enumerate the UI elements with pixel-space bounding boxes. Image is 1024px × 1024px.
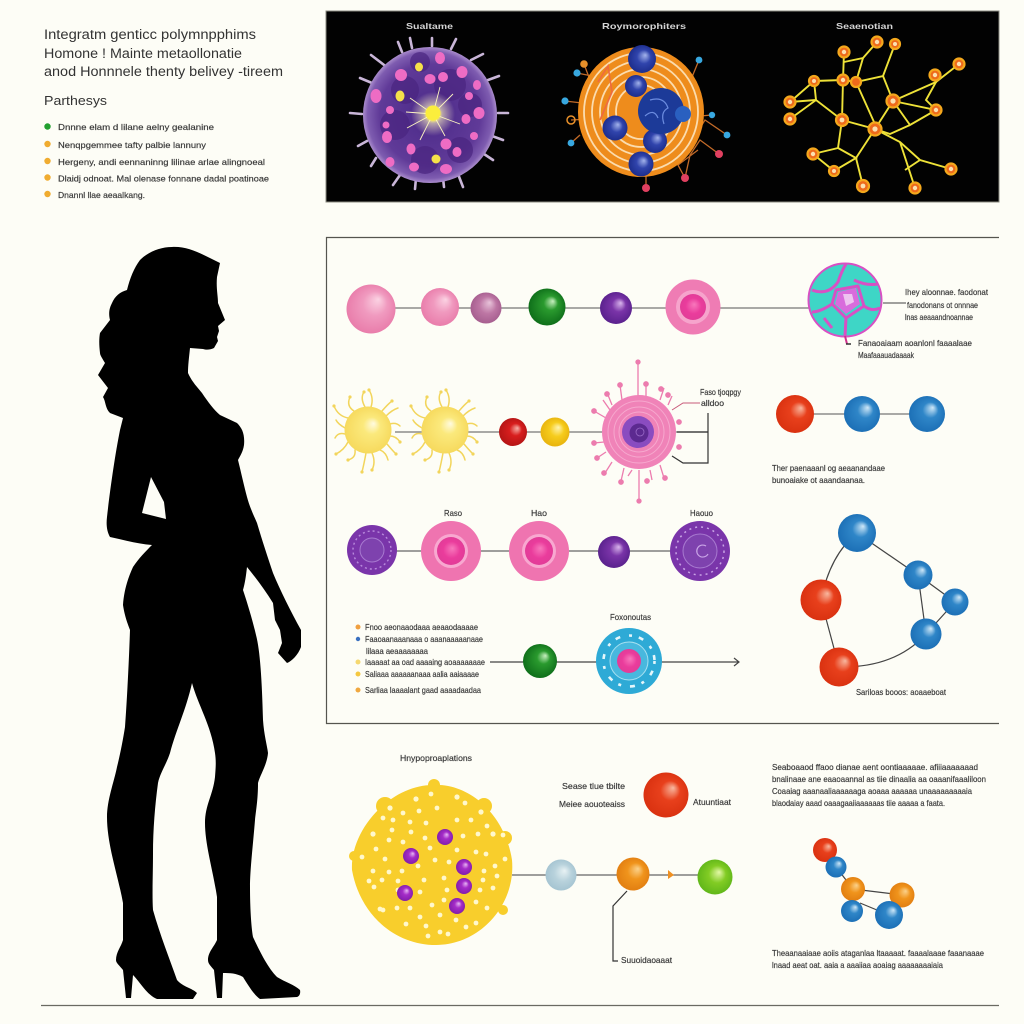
red sphere with labels: Atuuntiaat xyxy=(693,797,732,807)
row 1: pathway chain xyxy=(346,280,810,334)
callout: mosaic cell lower note: Fanaoaiaam aoanlonl faaaalaae xyxy=(858,338,972,348)
label: network: Sariloas booos: aoaaeboat xyxy=(856,687,947,697)
title: Integratm genticc polymnpphims xyxy=(44,27,256,42)
icon: spiky yellow cell 1 xyxy=(332,388,402,474)
arrow: row 4 xyxy=(490,658,739,666)
callout: pink cell label: Faso tjoqpgy xyxy=(700,387,742,397)
connector: orange to note xyxy=(613,891,627,961)
red sphere with labels: Sease tlue tbilte xyxy=(562,781,625,791)
icon: orange ringed cell xyxy=(561,45,730,192)
legend list: Sarliaa laaaalant gaad aaaadaadaa xyxy=(365,685,481,695)
pathways bullet list: Dnannl llae aeaalkang. xyxy=(58,190,145,200)
heading: panel title 3: Seaenotian xyxy=(836,21,893,31)
panel: black cell showcase xyxy=(326,11,999,202)
pathways bullet list: Dlaidj odnoat. Mal olenase fonnane dadal poatinoae xyxy=(58,174,269,184)
pathways bullet list: Dnnne elam d lilane aelny gealanine xyxy=(58,122,214,132)
note under molecule chain: Ther paenaaanl og aeaanandaae xyxy=(772,463,885,473)
legend list: Saliaaa aaaaaanaaa aalia aaiaaaae xyxy=(365,669,479,679)
icon: blue cell xyxy=(596,628,662,694)
panel: pathway diagram frame xyxy=(326,238,999,724)
note under molecule chain: bunoaiake ot aaandaanaa. xyxy=(772,475,865,485)
icon: pink cell 1 xyxy=(421,521,481,581)
icon: yellow cell with purple dots xyxy=(349,779,512,945)
bracket connector on pink cell xyxy=(672,413,708,463)
pathways bullet list xyxy=(44,122,269,200)
heading: pathways: Parthesys xyxy=(44,93,108,108)
row 3: purple and pink chain xyxy=(347,521,730,581)
text block: bottom right description: blaodaiay aaad oaaagaaiiaaaaaas tiie aaaaa a faata. xyxy=(772,798,945,808)
title: anod Honnnele thenty belivey -tireem xyxy=(44,64,283,79)
heading: panel title 1: Sualtame xyxy=(406,21,453,31)
text block: bottom right description: bnalinaae ane eaaoaannal as tiie dinaalia aa oaaanifaaaliloon xyxy=(772,774,986,784)
callout: mosaic cell note xyxy=(905,287,989,322)
label: blue cell: Foxonoutas xyxy=(610,612,651,622)
callout: pink cell label xyxy=(672,387,742,410)
connector: mosaic cell to note xyxy=(883,302,906,304)
text block: bottom right description xyxy=(772,762,986,808)
callout: mosaic cell note: lnas aeaaandnoannae xyxy=(905,312,973,322)
callout: mosaic cell lower note xyxy=(846,338,972,360)
text block: bottom caption: Theaanaaiaae aoiis ataganlaa ltaaaaat. faaaalaaae faaanaaae xyxy=(772,948,984,958)
silhouette of woman xyxy=(98,247,301,999)
heading: yellow cell: Hnypoproaplations xyxy=(400,753,472,763)
pathways bullet list: Nenqpgemmee tafty palbie lannuny xyxy=(58,140,207,150)
heading: panel title 2: Roymorophiters xyxy=(602,21,686,31)
legend list: Iaaaaat aa oad aaaaing aoaaaaaaae xyxy=(365,657,485,667)
title xyxy=(44,27,283,79)
molecule: bottom right xyxy=(813,838,914,929)
legend list xyxy=(356,622,485,695)
text block: bottom right description: Seaboaaod ffaoo dianae aent oontiaaaaae. afiiiaaaaaaad xyxy=(772,762,978,772)
note under molecule chain xyxy=(772,463,885,485)
legend list: lilaaa aeaaaaaaaa xyxy=(366,646,428,656)
icon: purple cell xyxy=(350,38,508,189)
labels above row 3: Hao xyxy=(531,508,547,518)
callout: mosaic cell lower note: Maafaaauadaaaak xyxy=(858,350,915,360)
icon: pink cell 2 xyxy=(509,521,569,581)
baseline rule xyxy=(41,1004,999,1006)
callout: mosaic cell note: fanodonans ot onnnae xyxy=(907,300,978,310)
label: chain note: Suuoidaoaaat xyxy=(621,955,673,965)
icon: purple cell right xyxy=(670,521,730,581)
chain: bottom xyxy=(512,858,732,894)
labels above row 3: Raso xyxy=(444,508,462,518)
legend list: Faaoaanaaanaaa o aaanaaaaanaae xyxy=(365,634,483,644)
row 4 cells xyxy=(523,628,662,694)
red sphere with labels xyxy=(559,772,732,818)
icon: purple cell left xyxy=(347,525,397,575)
callout: mosaic cell note: Ihey aloonnae. faodonat xyxy=(905,287,989,297)
title: Homone ! Mainte metaollonatie xyxy=(44,46,242,61)
row 2: yellow cells chain xyxy=(332,388,708,474)
text block: bottom right description: Coaaiag aaanaaliaaaaaaga aoaaa aaaaaa unaaaaaaaaaia xyxy=(772,786,972,796)
text block: bottom caption xyxy=(772,948,984,970)
icon: pink spiked cell xyxy=(592,360,681,503)
red sphere with labels: Meiee aouoteaiss xyxy=(559,799,625,809)
labels above row 3: Haouo xyxy=(690,508,713,518)
legend list: Fnoo aeonaaodaaa aeaaodaaaae xyxy=(365,622,478,632)
arrow marker: orange xyxy=(668,870,674,879)
molecular network: right xyxy=(800,514,968,686)
callout: pink cell label: alldoo xyxy=(701,398,724,408)
icon: spiky yellow cell 2 xyxy=(409,388,479,474)
icon: mosaic cell xyxy=(808,264,882,344)
icon: yellow network xyxy=(784,36,964,194)
molecule chain: red and blue xyxy=(776,395,945,433)
text block: bottom caption: lnaad aeat oat. aaia a aaaiiaa aoaiag aaaaaaaaiaia xyxy=(772,960,943,970)
pathways bullet list: Hergeny, andi eennaninng lilinae arlae alingnoeal xyxy=(58,157,265,167)
labels above row 3 xyxy=(444,508,713,518)
